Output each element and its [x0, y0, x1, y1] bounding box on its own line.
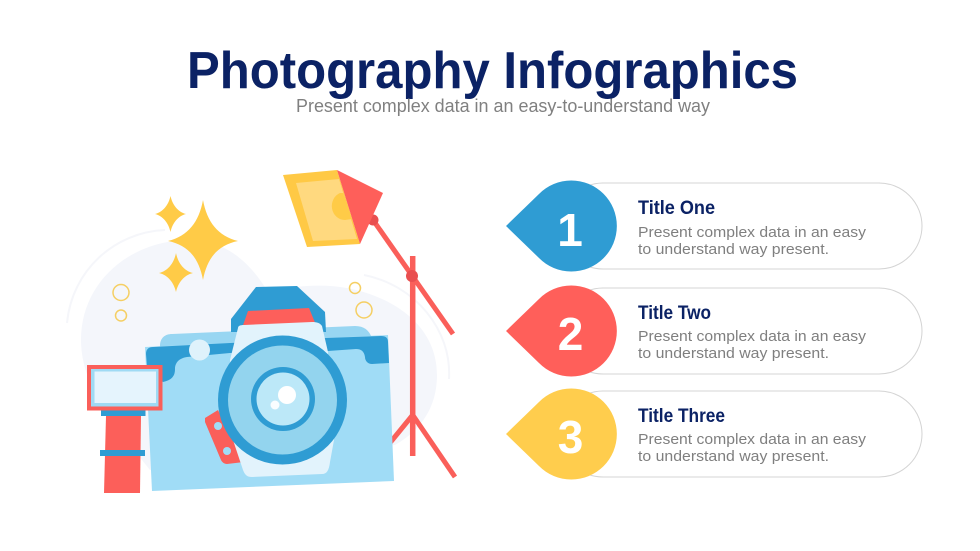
- bubbles right: [350, 282, 372, 318]
- red side bracket: [205, 410, 244, 464]
- camera body: [145, 335, 394, 491]
- bubbles left: [113, 284, 129, 321]
- item body: to understand way present.: [638, 448, 829, 465]
- badge number: 2: [558, 308, 583, 360]
- item body: Present complex data in an easy: [638, 431, 867, 448]
- viewfinder red strip: [242, 308, 316, 328]
- title: Photography Infographics: [187, 42, 798, 100]
- viewfinder prism: [231, 286, 326, 332]
- item title: Title Two: [638, 303, 711, 324]
- camera front plate: [230, 322, 334, 477]
- item body: to understand way present.: [638, 345, 829, 362]
- lens: [218, 336, 347, 464]
- camera top plate: [160, 326, 372, 350]
- camera: [145, 286, 394, 491]
- icon: small sparkle bottom: [159, 253, 193, 292]
- item body: Present complex data in an easy: [638, 328, 867, 345]
- pill outline: [560, 288, 922, 374]
- item title: Title Three: [638, 406, 725, 427]
- list item 1: [506, 181, 922, 272]
- light stand: [368, 214, 455, 477]
- camera grip band: [146, 336, 389, 382]
- teardrop badge: [506, 286, 617, 376]
- softbox lamp: [283, 170, 383, 247]
- flash unit: [87, 365, 162, 493]
- icon: large sparkle: [168, 200, 238, 280]
- decorative arc right: [364, 275, 449, 379]
- background blob: [81, 240, 437, 470]
- decorative arc left: [67, 230, 165, 323]
- item title: Title One: [638, 198, 715, 219]
- illustration: camera scene: [67, 170, 455, 493]
- teardrop badge: [506, 181, 617, 272]
- item body: Present complex data in an easy: [638, 224, 867, 241]
- pill outline: [560, 183, 922, 269]
- badge number: 1: [557, 204, 583, 256]
- camera shutter button: [189, 340, 210, 360]
- subtitle: Present complex data in an easy-to-understand way: [296, 96, 710, 116]
- icon: small sparkle top: [155, 196, 186, 232]
- teardrop badge: [506, 389, 617, 480]
- pill outline: [560, 391, 922, 477]
- list item 2: [506, 286, 922, 376]
- item body: to understand way present.: [638, 241, 829, 258]
- list item 3: [506, 389, 922, 480]
- badge number: 3: [558, 411, 583, 463]
